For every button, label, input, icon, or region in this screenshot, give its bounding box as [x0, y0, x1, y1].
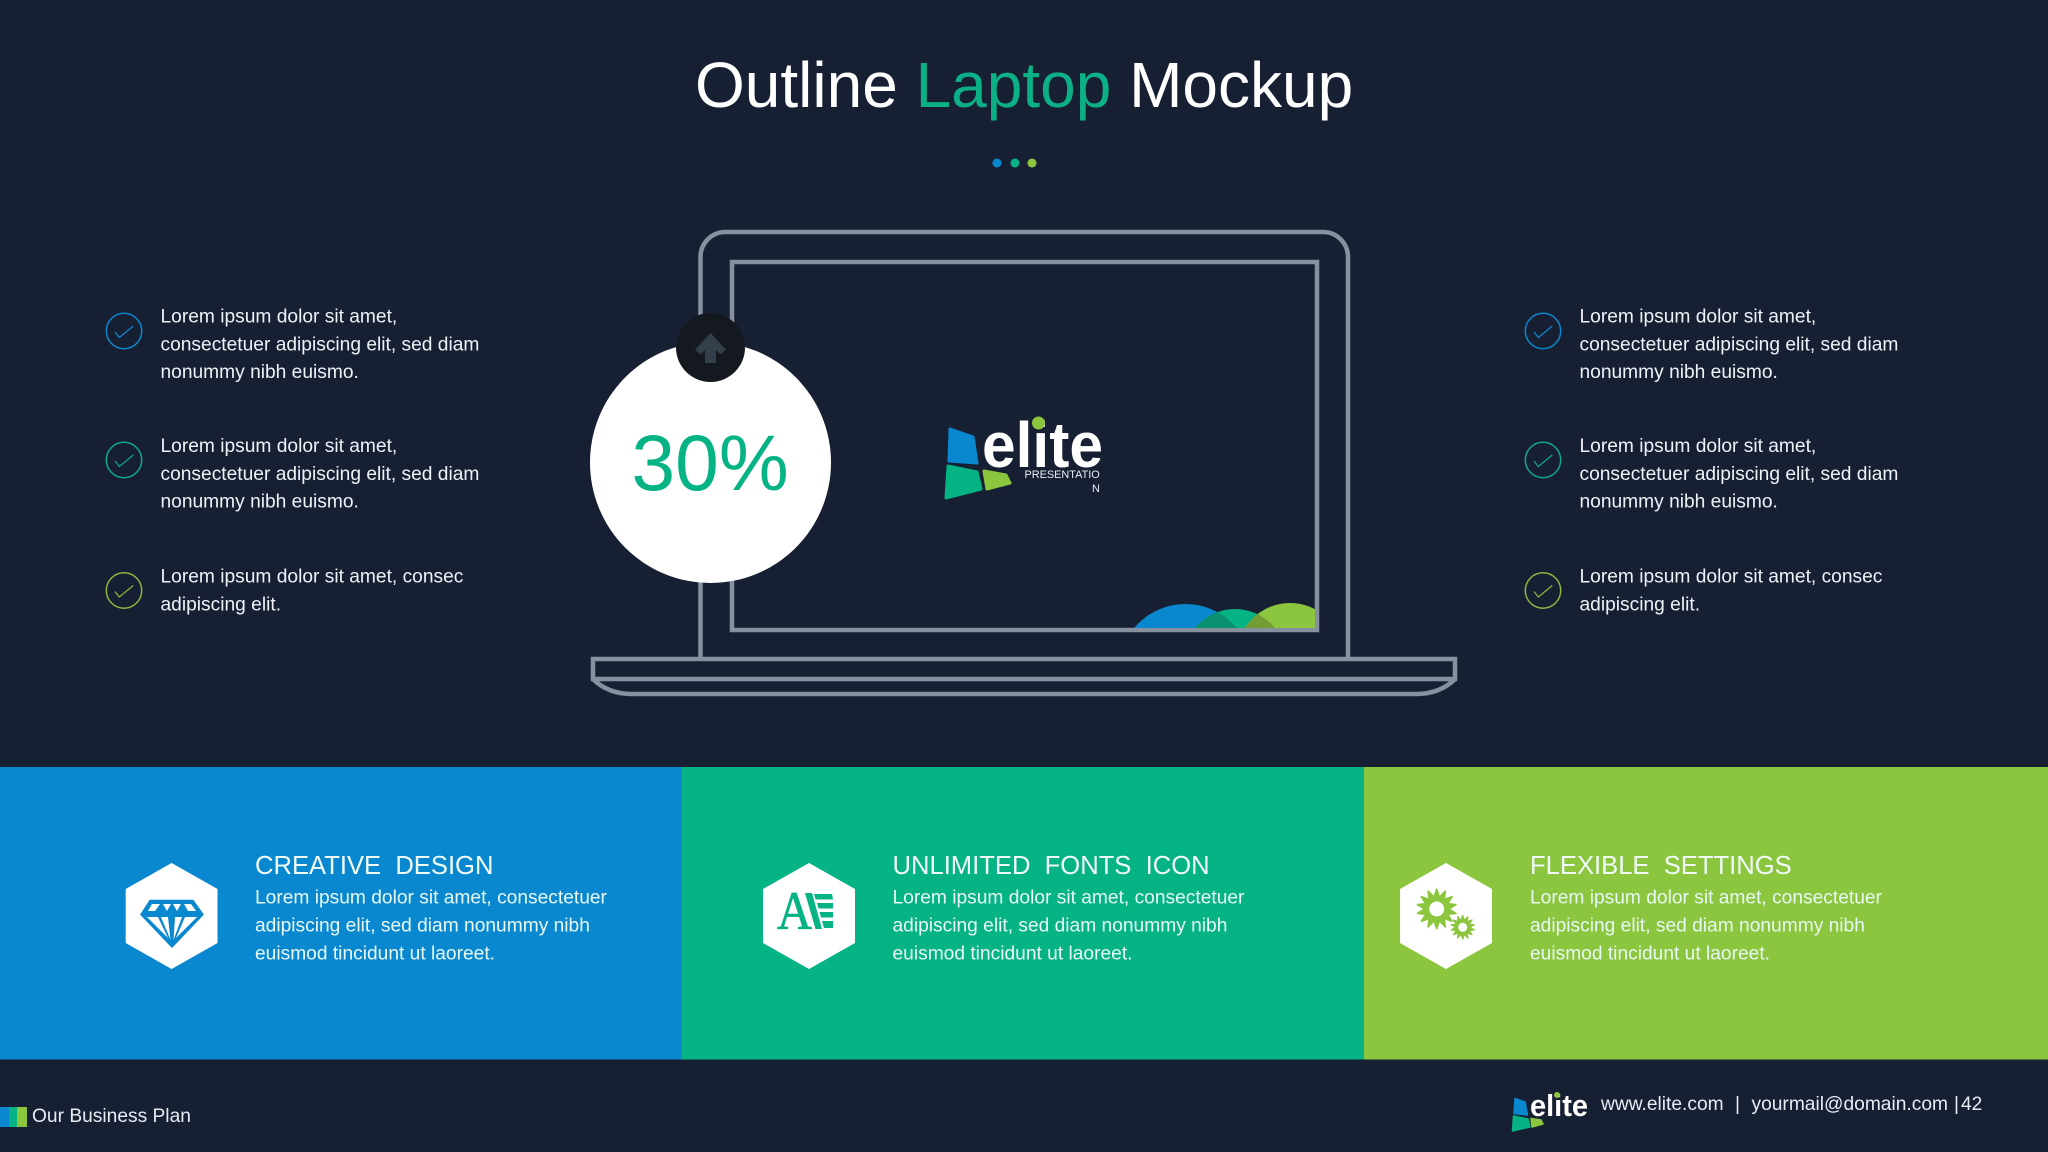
- footer contact line and page number: [1600, 1094, 1982, 1115]
- body text: adipiscing elit, sed diam nonummy nibh: [892, 916, 1227, 937]
- laptop lid: [700, 232, 1348, 659]
- check item 1: consectetuer adipiscing elit, sed diam: [160, 334, 479, 355]
- check item 3: adipiscing elit.: [1580, 594, 1700, 615]
- check item 2: [1525, 436, 1898, 512]
- body text: Lorem ipsum dolor sit amet, consectetuer: [1530, 888, 1883, 908]
- panel: creative design: [0, 767, 682, 1060]
- heading: UNLIMITED FONTS ICON: [892, 852, 1210, 880]
- check item 2: Lorem ipsum dolor sit amet,: [160, 436, 397, 457]
- check item 1: consectetuer adipiscing elit, sed diam: [1580, 334, 1898, 355]
- icon: up arrow badge: [676, 313, 745, 382]
- check item 3: [1525, 566, 1883, 615]
- stat circle: 30%: 30%: [632, 419, 789, 507]
- icon: font glyph in hexagon: [763, 863, 855, 969]
- panel: flexible settings: [1364, 767, 2048, 1060]
- check item 3: Lorem ipsum dolor sit amet, consec: [1580, 566, 1883, 588]
- footer contact line and page number: 42: [1961, 1094, 1982, 1115]
- laptop outline: [593, 232, 1455, 738]
- check item 3: adipiscing elit.: [160, 594, 281, 615]
- check item 2: [106, 436, 479, 512]
- screen logo: elite: [982, 409, 1103, 481]
- body text: euismod tincidunt ut laoreet.: [892, 943, 1132, 964]
- screen logo: N: [1092, 483, 1100, 495]
- panel: right checklist: [1525, 306, 1898, 615]
- stat circle: 30%: [590, 342, 831, 583]
- body text: [255, 888, 608, 964]
- footer contact line and page number: yourmail@domain.com: [1752, 1094, 1948, 1115]
- icon: gears in hexagon: [1400, 863, 1492, 969]
- screen hills: [1134, 603, 1315, 628]
- decorative title dots: [992, 158, 1036, 168]
- panel: unlimited fonts icon: [682, 767, 1364, 1060]
- screen logo: [946, 409, 1103, 498]
- body text: Lorem ipsum dolor sit amet, consectetuer: [892, 888, 1245, 908]
- check item 1: Lorem ipsum dolor sit amet,: [160, 306, 397, 328]
- icon: diamond in hexagon: [126, 863, 218, 969]
- check item 1: nonummy nibh euismo.: [1580, 362, 1778, 383]
- check item 2: nonummy nibh euismo.: [1580, 492, 1778, 512]
- check item 2: consectetuer adipiscing elit, sed diam: [160, 464, 479, 485]
- body text: [1530, 888, 1883, 964]
- body text: [892, 888, 1245, 964]
- screen logo: PRESENTATIO: [1024, 469, 1100, 481]
- check item 2: Lorem ipsum dolor sit amet,: [1580, 436, 1816, 457]
- body text: adipiscing elit, sed diam nonummy nibh: [1530, 916, 1865, 937]
- footer contact line and page number: |: [1954, 1094, 1959, 1115]
- check item 1: [106, 306, 479, 383]
- check item 1: Lorem ipsum dolor sit amet,: [1580, 306, 1816, 328]
- icon: font glyph in hexagon: A: [777, 881, 812, 941]
- heading: CREATIVE DESIGN: [255, 852, 493, 880]
- check item 3: Lorem ipsum dolor sit amet, consec: [160, 566, 464, 588]
- body text: adipiscing elit, sed diam nonummy nibh: [255, 916, 590, 937]
- footer label: our business plan: Our Business Plan: [32, 1106, 191, 1127]
- check item 3: [106, 566, 464, 615]
- body text: euismod tincidunt ut laoreet.: [255, 943, 495, 964]
- check item 1: nonummy nibh euismo.: [160, 362, 359, 383]
- panel: left checklist: [106, 306, 479, 615]
- laptop screen: [732, 262, 1317, 630]
- check item 1: [1525, 306, 1898, 383]
- title: Outline Laptop Mockup: [695, 49, 1353, 121]
- check item 2: consectetuer adipiscing elit, sed diam: [1580, 464, 1898, 485]
- footer logo: [1512, 1088, 1588, 1131]
- laptop base: [593, 659, 1455, 694]
- heading: FLEXIBLE SETTINGS: [1530, 852, 1792, 880]
- footer contact line and page number: |: [1735, 1094, 1740, 1115]
- check item 2: nonummy nibh euismo.: [160, 492, 359, 512]
- body text: euismod tincidunt ut laoreet.: [1530, 943, 1770, 964]
- footer logo: elite: [1530, 1088, 1588, 1123]
- body text: Lorem ipsum dolor sit amet, consectetuer: [255, 888, 608, 908]
- footer contact line and page number: www.elite.com: [1600, 1094, 1724, 1115]
